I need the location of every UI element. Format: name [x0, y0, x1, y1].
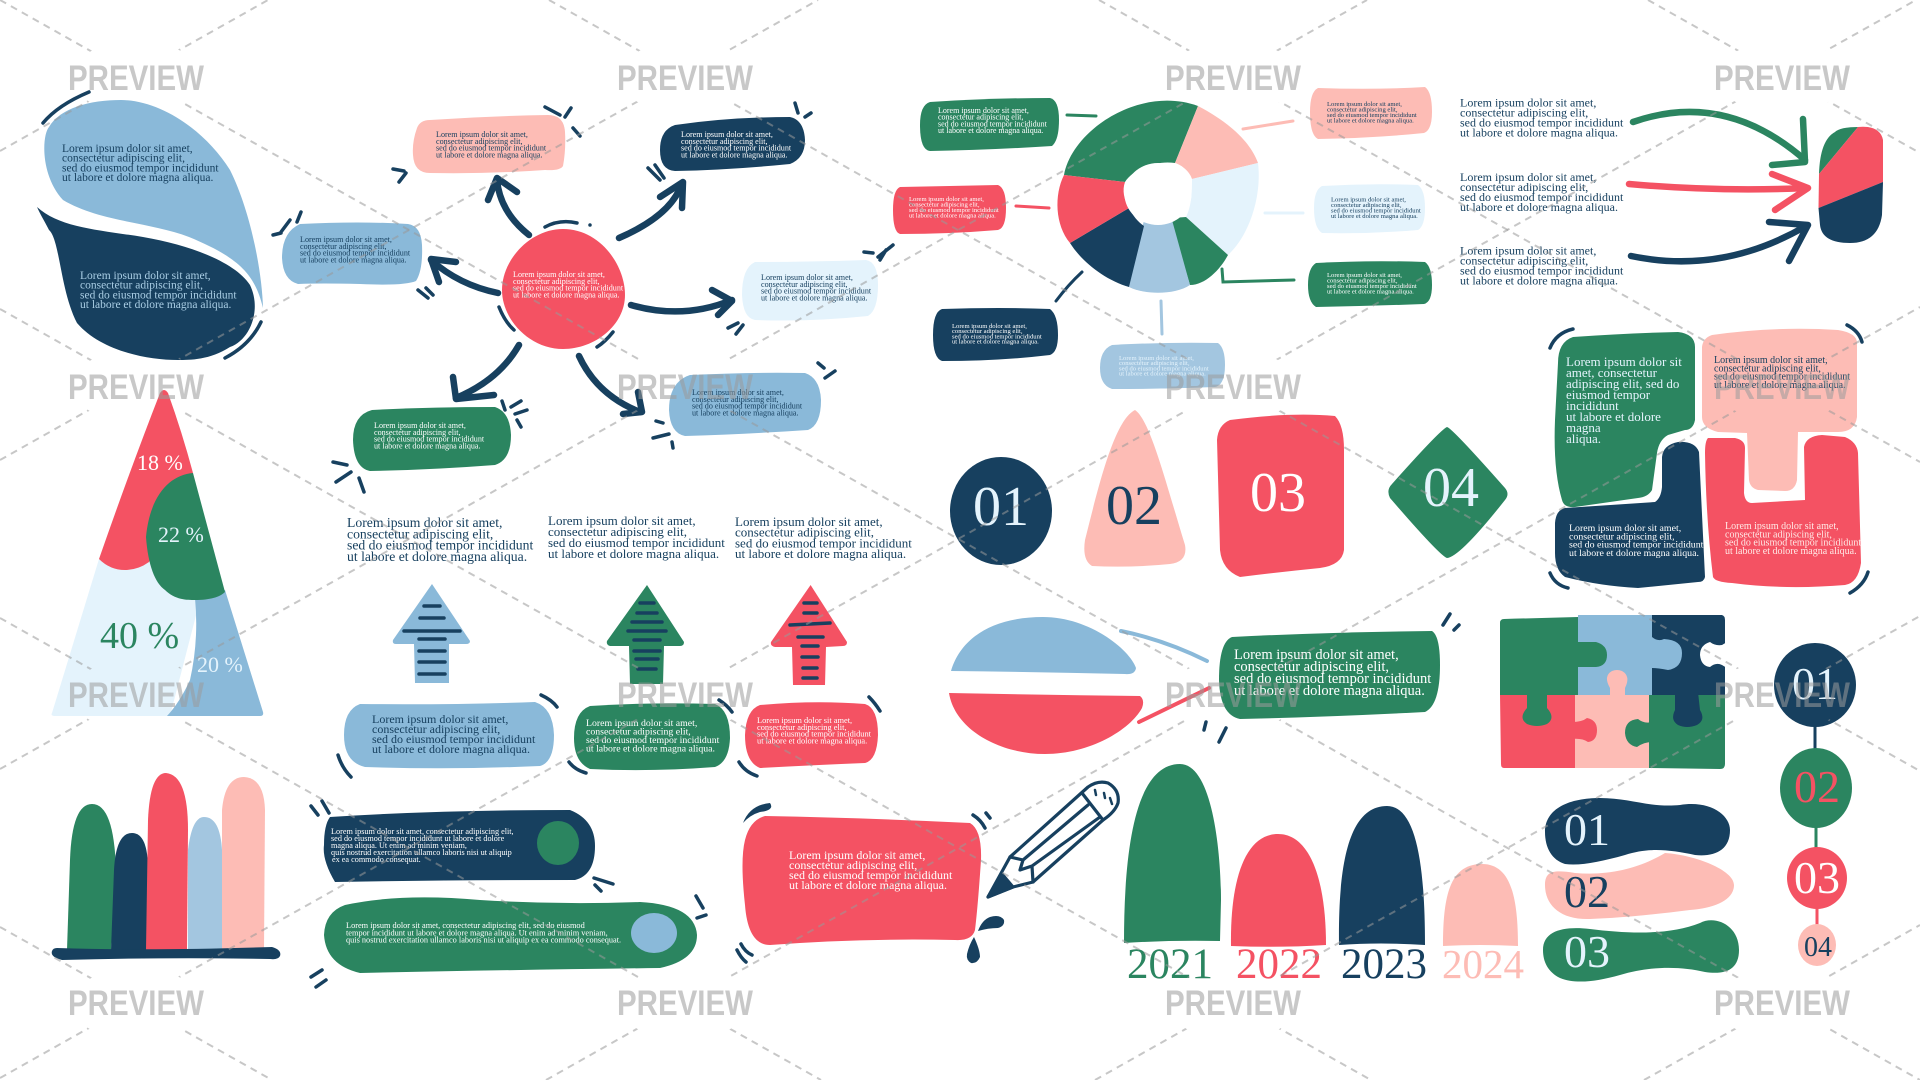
bar 2022: [1231, 834, 1326, 947]
pink box text: sed do eiusmod tempor incididunt: [436, 144, 547, 153]
blue up arrow: [393, 584, 470, 683]
number 03: 03: [1250, 462, 1306, 524]
green callout text: Lorem ipsum dolor sit amet,: [1234, 647, 1399, 663]
text column 1: sed do eiusmod tempor incididunt: [347, 538, 533, 553]
watermark: preview labels: PREVIEW: [1714, 368, 1850, 407]
shape 02: [1084, 410, 1185, 567]
pink box text: Lorem ipsum dolor sit amet,: [436, 130, 528, 139]
navy pill text: sed do eiusmod tempor incididunt ut labore et dolore: [331, 834, 505, 843]
green box text: ut labore et dolore magna aliqua.: [374, 441, 481, 450]
blue lower box text: ut labore et dolore magna aliqua.: [692, 408, 799, 417]
accent ticks: [737, 813, 990, 962]
hub text: ut labore et dolore magna aliqua.: [513, 290, 620, 299]
node 01: [1774, 643, 1856, 727]
blue lower box text: consectetur adipiscing elit,: [692, 395, 779, 404]
watermark: preview labels: PREVIEW: [617, 676, 753, 715]
note text: consectetur adipiscing elit,: [789, 858, 917, 872]
green right label: [1308, 261, 1432, 307]
hub text: consectetur adipiscing elit,: [513, 277, 600, 286]
node 04: [1798, 924, 1836, 966]
18 percent: 18 %: [137, 450, 183, 475]
pink label text: ut labore et dolore magna aliqua.: [1327, 118, 1414, 124]
text block 1: ut labore et dolore magna aliqua.: [1460, 126, 1618, 140]
pink block text: ut labore et dolore magna aliqua.: [1714, 380, 1846, 391]
panel: interlocking text blocks: [1550, 325, 1868, 593]
number 02: 02: [1106, 475, 1162, 537]
leaf text: Lorem ipsum dolor sit amet,: [80, 270, 211, 282]
blob 01: [1545, 798, 1730, 865]
connector lines: [1016, 115, 1303, 334]
green pill text: Lorem ipsum dolor sit amet, consectetur adipiscing elit, sed do eiusmod: [346, 921, 586, 930]
red callout text: consectetur adipiscing elit,: [757, 723, 847, 732]
teardrop accent ticks: [43, 92, 261, 358]
green callout text: consectetur adipiscing elit,: [1234, 659, 1389, 675]
icon: swoosh accent: [743, 803, 771, 823]
text column 3: ut labore et dolore magna aliqua.: [735, 546, 906, 561]
shape 04: [1388, 427, 1508, 558]
green callout: [1219, 631, 1440, 719]
text column 3: sed do eiusmod tempor incididunt: [735, 535, 912, 550]
green pill: [324, 897, 697, 973]
text column 1: consectetur adipiscing elit,: [347, 526, 493, 541]
text column 3: consectetur adipiscing elit,: [735, 525, 874, 540]
red block: [1705, 435, 1861, 587]
donut chart: [1057, 101, 1259, 293]
text block 3: Lorem ipsum dolor sit amet,: [1460, 244, 1596, 258]
bar 2023: [1339, 806, 1425, 945]
navy block text: Lorem ipsum dolor sit amet,: [1569, 523, 1681, 534]
blue lower box text: Lorem ipsum dolor sit amet,: [692, 388, 784, 397]
green label text: Lorem ipsum dolor sit amet,: [938, 106, 1029, 115]
watermark: preview labels: PREVIEW: [617, 984, 753, 1023]
pink block text: consectetur adipiscing elit,: [1714, 363, 1821, 374]
green block text: magna: [1566, 420, 1601, 435]
blue box text: consectetur adipiscing elit,: [300, 242, 387, 251]
blob 02: [1545, 853, 1734, 919]
text column 1: ut labore et dolore magna aliqua.: [347, 549, 527, 564]
pink box text: consectetur adipiscing elit,: [436, 137, 523, 146]
green dot: [537, 821, 579, 865]
pink block text: Lorem ipsum dolor sit amet,: [1714, 355, 1828, 366]
green box text: sed do eiusmod tempor incididunt: [374, 435, 485, 444]
red callout text: sed do eiusmod tempor incididunt: [757, 730, 872, 739]
light label: [1314, 184, 1425, 233]
panel: split circle callout: [949, 614, 1459, 754]
blob label 03: 03: [1564, 926, 1610, 977]
text column 2: ut labore et dolore magna aliqua.: [548, 546, 719, 561]
number 04: 04: [1423, 457, 1479, 519]
blue box text: ut labore et dolore magna aliqua.: [300, 255, 407, 264]
green block text: adipiscing elit, sed do: [1566, 376, 1679, 391]
panel: numbered blobs: [1543, 798, 1739, 982]
panel: three up arrows: [338, 513, 912, 777]
text block 1: Lorem ipsum dolor sit amet,: [1460, 96, 1596, 110]
arrow: to green box: [453, 345, 519, 399]
blue dot: [631, 913, 677, 953]
green pill text: tempor incididunt ut labore et dolore magna aliqua. Ut enim ad minim veniam,: [346, 928, 608, 937]
callout ticks: [338, 695, 880, 777]
blob label 02: 02: [1564, 866, 1610, 917]
pill ticks: [311, 801, 706, 987]
red label: [893, 185, 1006, 234]
label 01: 01: [1792, 658, 1838, 709]
blob label 01: 01: [1564, 804, 1610, 855]
text column 1: Lorem ipsum dolor sit amet,: [347, 515, 502, 530]
watermark: preview labels: PREVIEW: [68, 984, 204, 1023]
green callout text: ut labore et dolore magna aliqua.: [586, 744, 715, 754]
blue box text: Lorem ipsum dolor sit amet,: [300, 235, 392, 244]
icon: ink drops: [967, 916, 1004, 963]
blue half: [951, 617, 1136, 674]
light box text: consectetur adipiscing elit,: [761, 280, 848, 289]
panel: hub and spoke diagram: [273, 103, 893, 492]
arrow: green: [1633, 112, 1805, 165]
shape 01: [950, 457, 1052, 565]
blue callout text: consectetur adipiscing elit,: [372, 722, 500, 736]
red label text: ut labore et dolore magna aliqua.: [909, 212, 996, 220]
watermark: preview labels: PREVIEW: [1714, 676, 1850, 715]
pink block: [1702, 329, 1857, 491]
navy box: [660, 117, 805, 171]
panel: numbered shapes 01-04: [950, 410, 1508, 577]
teardrop text: ut labore et dolore magna aliqua.: [62, 172, 213, 184]
label 02: 02: [1794, 761, 1840, 812]
light blue label text: sed do eiusmod tempor incididunt: [1119, 365, 1209, 372]
panel: vertical timeline: [1774, 643, 1856, 966]
watermark: preview labels: PREVIEW: [1714, 59, 1850, 98]
red block text: consectetur adipiscing elit,: [1725, 529, 1832, 540]
green label text: ut labore et dolore magna aliqua.: [938, 126, 1043, 135]
leaf text: consectetur adipiscing elit,: [80, 280, 203, 292]
text block 3: sed do eiusmod tempor incididunt: [1460, 264, 1624, 278]
navy pill text: Lorem ipsum dolor sit amet, consectetur adipiscing elit,: [331, 827, 514, 836]
red callout text: Lorem ipsum dolor sit amet,: [757, 716, 852, 725]
blob 03: [1543, 920, 1739, 982]
green pill text: quis nostrud exercitation ullamco laboris nisi ut aliquip ex ea commodo consequat.: [346, 936, 621, 945]
red half: [949, 693, 1143, 754]
green box text: Lorem ipsum dolor sit amet,: [374, 421, 466, 430]
navy label text: Lorem ipsum dolor sit amet,: [952, 323, 1027, 330]
arrow: to blue lower box: [579, 356, 642, 414]
year 2022: 2022: [1236, 941, 1322, 988]
green label: [920, 98, 1059, 151]
blue box: [282, 222, 422, 285]
navy box text: ut labore et dolore magna aliqua.: [681, 150, 788, 159]
text block 2: ut labore et dolore magna aliqua.: [1460, 200, 1618, 214]
light box text: Lorem ipsum dolor sit amet,: [761, 273, 853, 282]
year 2021: 2021: [1127, 941, 1213, 988]
teardrop text: Lorem ipsum dolor sit amet,: [62, 143, 193, 155]
bar pink: [222, 777, 265, 950]
green right label text: ut labore et dolore magna aliqua.: [1327, 288, 1414, 296]
watermark: preview labels: PREVIEW: [1714, 984, 1850, 1023]
panel: yearly bars: [1124, 764, 1524, 988]
navy box text: consectetur adipiscing elit,: [681, 137, 768, 146]
blue lower box: [669, 373, 821, 436]
red callout: [745, 702, 878, 768]
green block text: eiusmod tempor: [1566, 387, 1651, 402]
bar red: [146, 773, 188, 950]
central red circle: [502, 229, 625, 349]
bar 2021: [1124, 764, 1221, 943]
watermark: preview labels: PREVIEW: [68, 368, 204, 407]
arrow: to navy box: [619, 182, 683, 238]
teardrop text: consectetur adipiscing elit,: [62, 153, 185, 165]
text column 3: Lorem ipsum dolor sit amet,: [735, 514, 883, 529]
watermark: preview labels: PREVIEW: [1165, 368, 1301, 407]
green blob: [146, 473, 225, 600]
red block text: sed do eiusmod tempor incididunt: [1725, 538, 1861, 549]
pink label: [1310, 87, 1432, 139]
watermark: preview labels: PREVIEW: [1165, 59, 1301, 98]
segmented capsule: [1818, 127, 1883, 243]
text block 3: consectetur adipiscing elit,: [1460, 254, 1588, 268]
blue callout text: Lorem ipsum dolor sit amet,: [372, 712, 508, 726]
navy label text: sed do eiusmod tempor incididunt: [952, 333, 1042, 340]
red segment: [99, 390, 193, 570]
corner brackets: [1550, 325, 1868, 593]
navy leaf: [37, 207, 255, 360]
connector red: [1139, 688, 1209, 722]
blue teardrop: [44, 100, 263, 308]
navy pill: [324, 810, 595, 882]
text block 2: Lorem ipsum dolor sit amet,: [1460, 170, 1596, 184]
hub text: sed do eiusmod tempor incididunt: [513, 284, 624, 293]
text block 2: consectetur adipiscing elit,: [1460, 180, 1588, 194]
blue segment: [167, 590, 263, 716]
red block text: ut labore et dolore magna aliqua.: [1725, 546, 1857, 557]
note text: Lorem ipsum dolor sit amet,: [789, 848, 925, 862]
hub accent ticks: [273, 103, 893, 492]
green block text: aliqua.: [1566, 431, 1601, 446]
green box: [353, 407, 511, 471]
red label text: consectetur adipiscing elit,: [909, 202, 980, 208]
green label text: sed do eiusmod tempor incididunt: [938, 119, 1048, 128]
red up arrow: [771, 585, 847, 685]
red note: [742, 816, 981, 945]
pink label text: sed do eiusmod tempor incididunt: [1327, 112, 1417, 119]
watermark: preview labels: PREVIEW: [68, 59, 204, 98]
navy label text: consectetur adipiscing elit,: [952, 328, 1023, 335]
panel: converging arrows: [1460, 96, 1883, 288]
watermark: preview labels: PREVIEW: [617, 59, 753, 98]
shape 03: [1217, 415, 1344, 577]
arrow: to blue box: [431, 259, 498, 293]
panel: bar chart: [52, 773, 280, 960]
arrow: navy: [1631, 222, 1808, 261]
green block text: Lorem ipsum dolor sit: [1566, 354, 1682, 369]
navy pill text: ex ea commodo consequat.: [332, 855, 421, 864]
green right label text: sed do eiusmod tempor incididunt: [1327, 283, 1417, 290]
light blue label text: Lorem ipsum dolor sit amet,: [1119, 355, 1194, 362]
40 percent: 40 %: [100, 615, 179, 657]
panel: pill callouts: [311, 801, 706, 987]
arrow: red: [1629, 174, 1808, 210]
panel: teardrop pair: [37, 92, 263, 360]
node 02: [1780, 748, 1852, 828]
node 03: [1787, 847, 1847, 909]
year 2023: 2023: [1341, 941, 1427, 988]
pink box text: ut labore et dolore magna aliqua.: [436, 150, 543, 159]
green callout: [574, 703, 730, 770]
pink label text: consectetur adipiscing elit,: [1327, 106, 1398, 114]
number 01: 01: [973, 476, 1029, 538]
watermark: preview labels: PREVIEW: [1165, 984, 1301, 1023]
connectors: [1814, 725, 1816, 750]
text block 2: sed do eiusmod tempor incididunt: [1460, 190, 1624, 204]
note text: ut labore et dolore magna aliqua.: [789, 878, 947, 892]
light label text: ut labore et dolore magna aliqua.: [1331, 213, 1418, 220]
navy label: [933, 308, 1058, 361]
pink block text: sed do eiusmod tempor incididunt: [1714, 372, 1850, 383]
light blue label: [1100, 343, 1225, 389]
label 03: 03: [1794, 852, 1840, 903]
year 2024: 2024: [1442, 941, 1524, 987]
icon: jigsaw puzzle: [1500, 615, 1727, 769]
navy block text: ut labore et dolore magna aliqua.: [1569, 548, 1699, 559]
text block 1: consectetur adipiscing elit,: [1460, 106, 1588, 120]
light label text: consectetur adipiscing elit,: [1331, 202, 1402, 209]
bar 2024: [1443, 864, 1518, 946]
green block text: incididunt: [1566, 398, 1619, 413]
text block 3: ut labore et dolore magna aliqua.: [1460, 274, 1618, 288]
navy pill text: magna aliqua. Ut enim ad minim veniam,: [331, 841, 467, 850]
bar navy: [111, 833, 148, 950]
text column 2: sed do eiusmod tempor incididunt: [548, 535, 725, 550]
navy block text: sed do eiusmod tempor incididunt: [1569, 540, 1704, 551]
bar blue: [188, 817, 222, 950]
bar green: [67, 804, 116, 950]
light segment: [52, 558, 200, 716]
green callout text: consectetur adipiscing elit,: [586, 726, 691, 738]
20 percent: 20 %: [197, 652, 243, 677]
green block: [1555, 332, 1695, 507]
blue box text: sed do eiusmod tempor incididunt: [300, 249, 411, 258]
green callout text: ut labore et dolore magna aliqua.: [1234, 683, 1425, 699]
green block text: ut labore et dolore: [1566, 409, 1661, 424]
green up arrow: [607, 585, 684, 684]
pink label text: Lorem ipsum dolor sit amet,: [1327, 101, 1402, 108]
green callout text: Lorem ipsum dolor sit amet,: [586, 718, 697, 729]
green right label text: consectetur adipiscing elit,: [1327, 278, 1398, 284]
connector blue: [1121, 631, 1207, 661]
light label text: Lorem ipsum dolor sit amet,: [1331, 196, 1406, 204]
navy block text: consectetur adipiscing elit,: [1569, 531, 1675, 542]
light blue label text: consectetur adipiscing elit,: [1119, 360, 1190, 367]
green box text: consectetur adipiscing elit,: [374, 428, 461, 437]
panel: percentage pyramid: [52, 390, 263, 716]
leaf text: sed do eiusmod tempor incididunt: [80, 289, 237, 301]
label 04: 04: [1804, 932, 1832, 963]
red block text: Lorem ipsum dolor sit amet,: [1725, 521, 1839, 532]
text block 1: sed do eiusmod tempor incididunt: [1460, 116, 1624, 130]
green callout text: sed do eiusmod tempor incididunt: [586, 735, 720, 746]
red label text: Lorem ipsum dolor sit amet,: [909, 196, 984, 203]
green block text: amet, consectetur: [1566, 365, 1658, 380]
red callout text: ut labore et dolore magna aliqua.: [757, 736, 867, 745]
arrow: to light box: [631, 290, 732, 315]
callout ticks: [1204, 614, 1459, 742]
leaf text: ut labore et dolore magna aliqua.: [80, 299, 231, 311]
blue callout text: sed do eiusmod tempor incididunt: [372, 732, 536, 746]
light box: [742, 260, 878, 320]
navy box text: Lorem ipsum dolor sit amet,: [681, 130, 773, 139]
navy box text: sed do eiusmod tempor incididunt: [681, 144, 792, 153]
panel: donut chart with labels: [893, 87, 1432, 389]
watermark: preview labels: PREVIEW: [617, 368, 753, 407]
green callout text: sed do eiusmod tempor incididunt: [1234, 671, 1431, 687]
22 percent: 22 %: [158, 522, 204, 547]
navy block: [1555, 442, 1705, 588]
baseline: [52, 947, 280, 960]
watermark: preview labels: PREVIEW: [1165, 676, 1301, 715]
navy pill text: quis nostrud exercitation ullamco laboris nisi ut aliquip: [331, 848, 512, 857]
watermark: preview labels: PREVIEW: [68, 676, 204, 715]
light box text: ut labore et dolore magna aliqua.: [761, 293, 868, 302]
hub text: Lorem ipsum dolor sit amet,: [513, 270, 605, 279]
note text: sed do eiusmod tempor incididunt: [789, 868, 953, 882]
navy label text: ut labore et dolore magna aliqua.: [952, 339, 1039, 346]
teardrop text: sed do eiusmod tempor incididunt: [62, 162, 219, 174]
green label text: consectetur adipiscing elit,: [938, 113, 1024, 122]
text column 2: consectetur adipiscing elit,: [548, 524, 687, 539]
panel: red note with pencil: [737, 782, 1118, 963]
green right label text: Lorem ipsum dolor sit amet,: [1327, 272, 1402, 279]
arrow: to pink box: [488, 178, 529, 235]
red label text: sed do eiusmod tempor incididunt: [909, 207, 999, 214]
light box text: sed do eiusmod tempor incididunt: [761, 287, 872, 296]
text column 2: Lorem ipsum dolor sit amet,: [548, 513, 696, 528]
blue callout: [344, 702, 554, 768]
icon: pencil: [988, 782, 1118, 897]
light blue label text: ut labore et dolore magna aliqua.: [1119, 371, 1206, 378]
light label text: sed do eiusmod tempor incididunt: [1331, 208, 1421, 214]
blue callout text: ut labore et dolore magna aliqua.: [372, 742, 530, 756]
blue lower box text: sed do eiusmod tempor incididunt: [692, 402, 803, 411]
pink box: [413, 115, 565, 173]
